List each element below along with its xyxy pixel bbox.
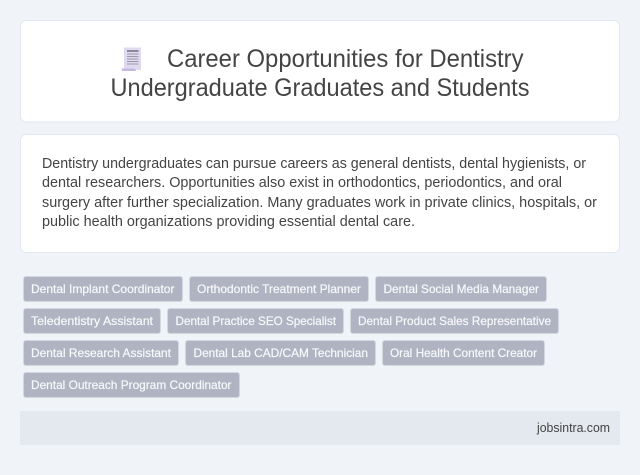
tag: Dental Social Media Manager: Dental Social Media Manager [384,282,539,296]
tag: Orthodontic Treatment Planner: Orthodontic Treatment Planner [197,282,361,296]
tag: Teledentistry Assistant: Teledentistry Assistant [31,314,154,328]
tag: Dental Outreach Program Coordinator: Dental Outreach Program Coordinator [31,378,232,392]
panel: description [20,134,620,252]
tag: Dental Implant Coordinator: Dental Implant Coordinator [31,282,174,296]
tag: Oral Health Content Creator [382,340,544,366]
text block: description: public health organizations providing essential dental care. [42,214,415,230]
text block: description: Dentistry undergraduates can pursue careers as general dentists, dental hygienists, or [42,156,586,172]
text block: description: dental researchers. Opportunities also exist in orthodontics, periodontics, and oral [42,175,562,191]
tag: Teledentistry Assistant [24,308,160,334]
icon: document scroll [122,48,141,71]
title: Undergraduate Graduates and Students [110,74,530,102]
tag: Dental Lab CAD/CAM Technician [186,340,376,366]
title: Career Opportunities for Dentistry [167,45,524,73]
tag: Dental Research Assistant [24,340,178,366]
tag: Dental Implant Coordinator [24,276,182,302]
tag: Dental Product Sales Representative [350,308,558,334]
tag: Dental Product Sales Representative: Dental Product Sales Representative [358,314,551,328]
panel: header [20,20,620,122]
tag: Dental Practice SEO Specialist [168,308,344,334]
tag: Orthodontic Treatment Planner [190,276,368,302]
tag: Oral Health Content Creator: Oral Health Content Creator [390,346,537,360]
title [110,45,530,102]
text block: description [42,156,597,230]
tag: Dental Outreach Program Coordinator [24,372,240,398]
tag: Dental Research Assistant: Dental Research Assistant [31,346,172,360]
tag: Dental Social Media Manager [376,276,546,302]
footer bar [20,411,620,445]
tag: Dental Lab CAD/CAM Technician: Dental Lab CAD/CAM Technician [194,346,368,360]
footer text: site name: jobsintra.com [536,420,610,435]
text block: description: surgery after further specialization. Many graduates work in private clinics, hospitals, or [42,195,597,211]
tag list [24,276,558,398]
tag: Dental Practice SEO Specialist: Dental Practice SEO Specialist [176,314,337,328]
